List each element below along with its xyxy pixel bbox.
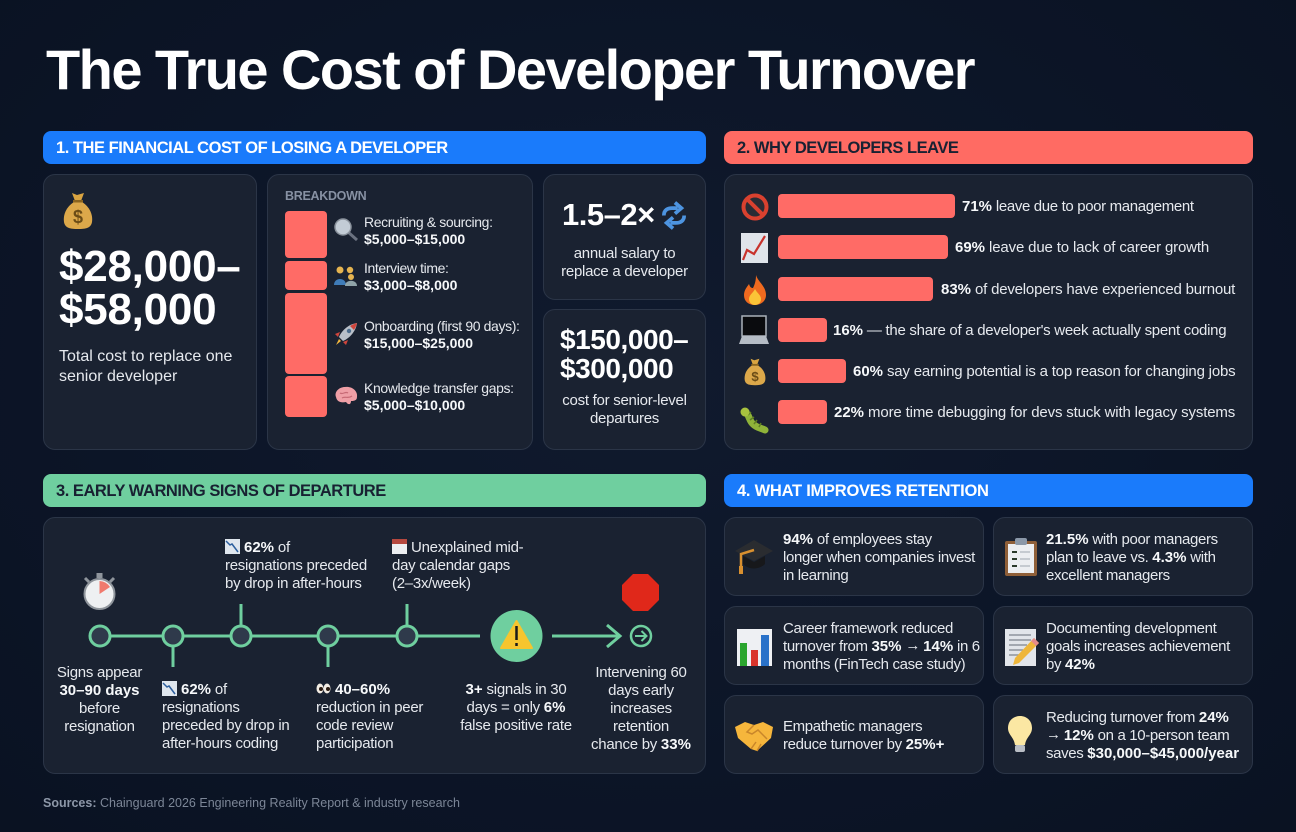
- stat: management: 71% leave due to poor management: [962, 198, 1194, 215]
- caption: departures: [590, 410, 659, 427]
- text: intervening: days early: [608, 682, 674, 699]
- text: calendar gaps: [392, 539, 523, 592]
- bar: coding: [778, 318, 826, 342]
- item: knowledge: [364, 380, 514, 413]
- icon: repeat arrows: [662, 201, 686, 230]
- senior cost figure: $150,000–: [560, 324, 688, 355]
- icon: bug: [740, 408, 768, 434]
- text: peer review: [316, 681, 424, 752]
- heading: section 3: 3. EARLY WARNING SIGNS OF DEPARTURE: [56, 482, 386, 500]
- text: peer review: reduction in peer: [316, 699, 423, 716]
- big figure: $28,000–: [59, 242, 241, 291]
- big figure: [59, 242, 241, 334]
- item: knowledge: Knowledge transfer gaps:: [364, 380, 514, 396]
- icon: magnifier: [334, 218, 358, 241]
- panel: savings: [993, 695, 1253, 774]
- item: interview: Interview time:: [364, 260, 449, 276]
- bar: management: [778, 194, 954, 218]
- text: Documenting development: [1046, 620, 1216, 637]
- text: in learning: [783, 567, 848, 584]
- icon: money bag small: $: [751, 369, 759, 384]
- caption: [561, 245, 688, 280]
- text: signs appear: resignation: [64, 718, 135, 735]
- text: signs appear: [57, 664, 142, 735]
- panel: early warning timeline: [43, 517, 706, 774]
- text: signs appear: 30–90 days: [59, 682, 140, 699]
- text: [783, 531, 976, 584]
- breakdown label: BREAKDOWN: [285, 189, 366, 203]
- caption: replace a developer: [561, 263, 688, 280]
- text: intervening: increases: [610, 700, 672, 717]
- text: longer when companies invest: [783, 549, 975, 566]
- text: signs appear: Signs appear: [57, 664, 142, 681]
- title: The True Cost of Developer Turnover: [46, 38, 974, 101]
- text: peer review: participation: [316, 735, 393, 752]
- caption: [59, 348, 232, 385]
- heading: section 3: [43, 474, 706, 507]
- bar: career growth: [778, 235, 948, 259]
- text: after-hours below: preceded by drop in: [162, 717, 289, 734]
- stat: career growth: 69% leave due to lack of career growth: [955, 239, 1209, 256]
- text: 21.5% with poor managers: [1046, 531, 1218, 548]
- heading: section 1: 1. THE FINANCIAL COST OF LOSING A DEVELOPER: [56, 139, 448, 157]
- sources: Sources: Chainguard 2026 Engineering Reality Report & industry research: [43, 796, 460, 810]
- text: [1046, 709, 1239, 763]
- heading: section 2: 2. WHY DEVELOPERS LEAVE: [737, 139, 958, 157]
- text: three signals: days = only 6%: [467, 699, 565, 716]
- text: months (FinTech case study): [783, 656, 965, 673]
- stacked bar: interview: [285, 261, 327, 290]
- senior cost figure: [560, 324, 688, 384]
- icon: light bulb: [1008, 716, 1032, 754]
- item: interview: $3,000–$8,000: [364, 277, 457, 293]
- heading: section 1: [43, 131, 706, 164]
- panel: empathetic managers: [724, 695, 984, 774]
- icon: brain: [336, 386, 358, 404]
- text: → 12% on a 10-person team: [1046, 726, 1229, 744]
- caption: annual salary to: [574, 245, 675, 262]
- big figure: $58,000: [59, 285, 216, 334]
- caption: Total cost to replace one: [59, 348, 232, 365]
- text: saves $30,000–$45,000/year: [1046, 745, 1239, 762]
- text: after-hours below: [162, 681, 289, 752]
- stat: debugging: 22% more time debugging for devs stuck with legacy systems: [834, 404, 1235, 421]
- caption: [562, 392, 687, 427]
- senior cost figure: $300,000: [560, 353, 673, 384]
- icon: money bag: [64, 193, 92, 229]
- panel: documenting goals: [993, 606, 1253, 685]
- text: by 42%: [1046, 656, 1095, 673]
- icon: laptop: [739, 315, 769, 344]
- heading: section 4: [724, 474, 1253, 507]
- text: turnover from 35% → 14% in 6: [783, 637, 980, 655]
- multiple figure: 1.5–2×: [562, 197, 655, 232]
- text: calendar gaps: Unexplained mid-: [411, 539, 523, 556]
- panel: breakdown: [267, 174, 533, 450]
- icon: handshake: [735, 720, 773, 752]
- stat: coding: 16% — the share of a developer's week actually spent coding: [833, 322, 1226, 339]
- text: after-hours below: resignations: [162, 699, 240, 716]
- item: onboarding: Onboarding (first 90 days):: [364, 318, 520, 334]
- text: after-hours above: by drop in after-hours: [225, 575, 362, 592]
- text: three signals: 3+ signals in 30: [466, 681, 566, 698]
- stacked bar: onboarding: [285, 293, 327, 374]
- text: after-hours above: 62% of: [244, 539, 290, 556]
- panel: learning: [724, 517, 984, 596]
- text: three signals: [460, 681, 572, 734]
- text: after-hours below: after-hours coding: [162, 735, 278, 752]
- panel: career framework: [724, 606, 984, 685]
- text: intervening: Intervening 60: [595, 664, 687, 681]
- caption: cost for senior-level: [562, 392, 687, 409]
- stacked bar: recruiting: [285, 211, 327, 258]
- stat: earnings: 60% say earning potential is a top reason for changing jobs: [853, 363, 1235, 380]
- panel: why developers leave: [724, 174, 1253, 450]
- bar: earnings: [778, 359, 846, 383]
- icon: people: [334, 266, 357, 286]
- icon: graduation cap: [736, 540, 772, 574]
- stat: burnout: 83% of developers have experienced burnout: [941, 281, 1235, 298]
- text: [1046, 531, 1218, 584]
- icon: clipboard: [1005, 538, 1037, 576]
- icon: memo: [1005, 629, 1039, 666]
- item: recruiting: Recruiting & sourcing:: [364, 214, 493, 230]
- item: onboarding: $15,000–$25,000: [364, 335, 473, 351]
- text: Reducing turnover from 24%: [1046, 709, 1229, 726]
- icon: money bag small: [744, 358, 766, 386]
- caption: senior developer: [59, 368, 177, 385]
- text: after-hours above: resignations preceded: [225, 557, 367, 574]
- text: [783, 620, 980, 674]
- text: intervening: retention: [613, 718, 669, 735]
- item: knowledge: $5,000–$10,000: [364, 397, 465, 413]
- icon: rocket: [335, 323, 357, 345]
- text: goals increases achievement: [1046, 638, 1230, 655]
- item: recruiting: [364, 214, 493, 247]
- text: after-hours below: 62% of: [181, 681, 227, 698]
- text: [783, 718, 944, 754]
- text: Career framework reduced: [783, 620, 953, 637]
- icon: fire: [744, 275, 766, 305]
- icon: prohibited: [742, 194, 768, 220]
- item: interview: [364, 260, 457, 293]
- panel: salary multiple: [543, 174, 706, 300]
- text: intervening: chance by 33%: [591, 736, 691, 753]
- text: three signals: false positive rate: [460, 717, 572, 734]
- text: intervening: [591, 664, 691, 753]
- text: [1046, 620, 1230, 674]
- icon: chart up: [741, 233, 768, 263]
- text: after-hours above: [225, 539, 367, 592]
- text: 94% of employees stay: [783, 531, 932, 548]
- text: calendar gaps: day calendar gaps: [392, 557, 510, 574]
- heading: section 2: [724, 131, 1253, 164]
- heading: section 4: 4. WHAT IMPROVES RETENTION: [737, 482, 989, 500]
- text: reduce turnover by 25%+: [783, 736, 944, 753]
- icon: money bag: $: [73, 207, 83, 227]
- text: peer review: code review: [316, 717, 393, 734]
- item: recruiting: $5,000–$15,000: [364, 231, 465, 247]
- bar: debugging: [778, 400, 826, 424]
- stacked bar: knowledge: [285, 376, 327, 417]
- text: signs appear: before: [79, 700, 120, 717]
- panel: managers: [993, 517, 1253, 596]
- icon: bar chart: [737, 629, 772, 666]
- bar: burnout: [778, 277, 932, 301]
- text: calendar gaps: (2–3x/week): [392, 575, 471, 592]
- item: onboarding: [364, 318, 520, 351]
- text: Empathetic managers: [783, 718, 922, 735]
- panel: total cost: [43, 174, 257, 450]
- text: excellent managers: [1046, 567, 1170, 584]
- text: peer review: 40–60%: [335, 681, 390, 698]
- timeline graphic: [84, 573, 659, 667]
- text: plan to leave vs. 4.3% with: [1046, 549, 1216, 566]
- panel: senior cost: [543, 309, 706, 450]
